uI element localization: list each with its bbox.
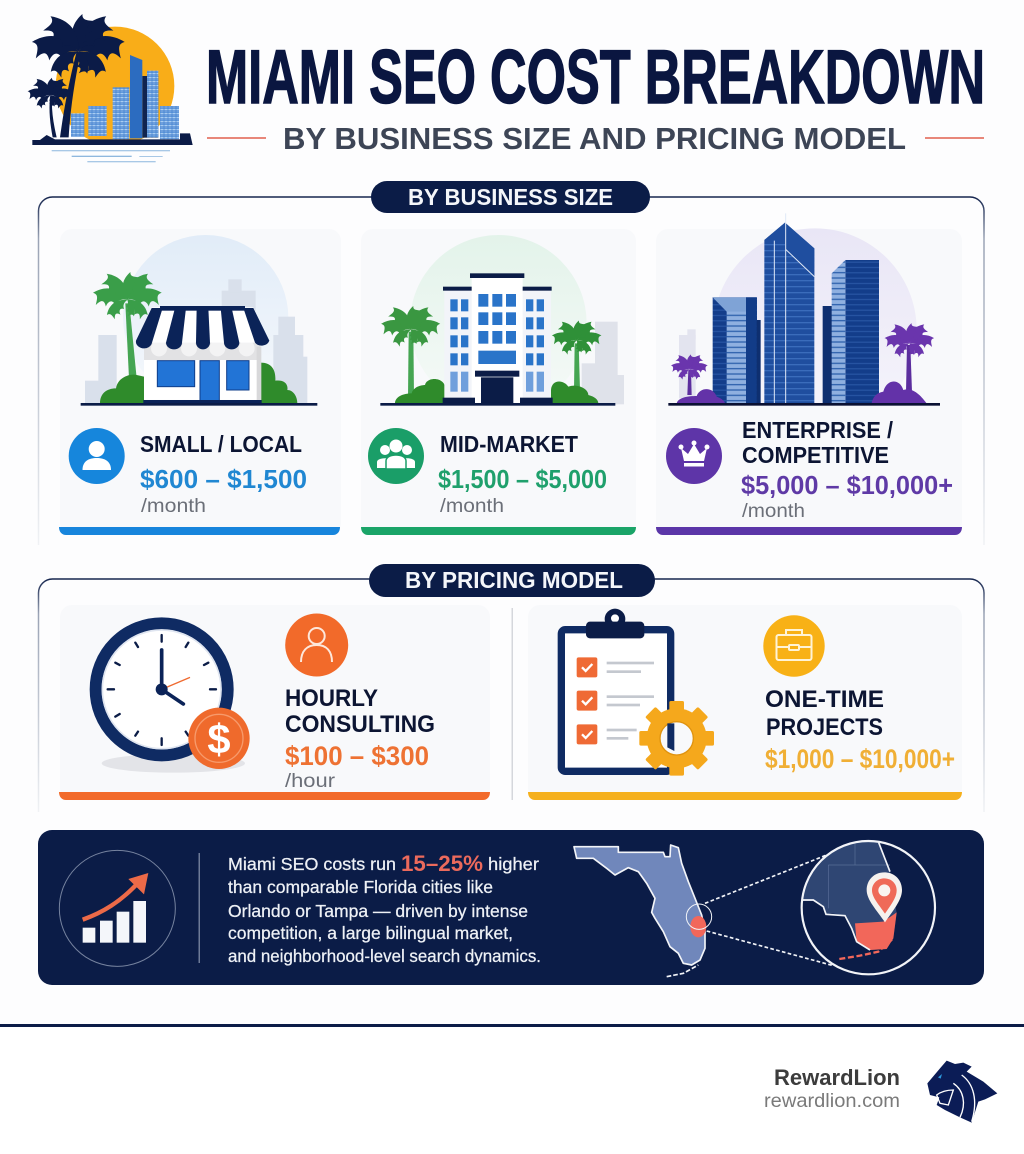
label and price: ENTERPRISE / — [742, 417, 894, 443]
icon: lion head — [927, 1061, 997, 1123]
label and price: HOURLY — [285, 685, 378, 712]
card: small / local — [59, 229, 341, 535]
illustration: clock with dollar coin: $ — [207, 715, 231, 762]
label and price — [741, 417, 953, 522]
footer brand — [764, 1061, 997, 1123]
card: one-time projects — [528, 605, 962, 800]
label and price: COMPETITIVE — [742, 442, 889, 468]
label and price: MID-MARKET — [440, 431, 578, 457]
panel: by pricing model — [38, 564, 984, 812]
illustration: office building — [380, 235, 624, 412]
section frame — [38, 197, 984, 545]
card: hourly consulting — [59, 605, 490, 800]
label and price: /month — [440, 496, 504, 517]
section heading pill: BY BUSINESS SIZE — [408, 184, 613, 210]
icon: rising bar chart — [59, 850, 175, 966]
label and price: SMALL / LOCAL — [140, 431, 302, 457]
illustration: clock with dollar coin — [96, 623, 250, 773]
illustration: storefront — [81, 235, 317, 406]
label and price: /month — [141, 496, 206, 517]
text: Miami costs note: Orlando or Tampa — driven by intense — [228, 901, 528, 921]
section heading pill: BY PRICING MODEL — [405, 567, 623, 593]
icon: person outline — [285, 614, 348, 676]
illustration: skyscrapers — [668, 214, 940, 406]
label and price: $1,000 – $10,000+ — [765, 744, 955, 774]
card: mid-market — [361, 229, 636, 535]
section frame — [38, 579, 984, 812]
text: Miami costs note: 15–25% — [401, 851, 483, 876]
label and price: ONE-TIME — [765, 686, 884, 713]
text: Miami costs note — [228, 851, 541, 966]
footer brand: RewardLion — [774, 1065, 900, 1090]
icon: group of people — [368, 428, 424, 484]
section heading pill — [371, 181, 650, 213]
map: Florida with Miami zoom — [574, 838, 935, 977]
label and price — [765, 686, 955, 774]
text: Miami costs note: and neighborhood-level search dynamics. — [228, 946, 541, 966]
accent bar — [656, 527, 962, 535]
callout: Miami premium banner — [38, 830, 984, 985]
panel: by business size — [38, 181, 984, 545]
label and price — [140, 431, 307, 517]
label and price: PROJECTS — [766, 714, 883, 741]
footer brand: rewardlion.com — [764, 1090, 900, 1112]
footer divider — [0, 1024, 1024, 1027]
text: Miami costs note: Miami SEO costs run — [228, 854, 396, 874]
accent bar — [59, 792, 490, 800]
icon: briefcase — [763, 615, 825, 677]
text: Miami costs note: than comparable Florida cities like — [228, 877, 493, 897]
label and price: /hour — [285, 771, 336, 792]
text: Miami costs note: higher — [488, 854, 539, 874]
label and price: $5,000 – $10,000+ — [741, 470, 953, 500]
card: enterprise / competitive — [656, 213, 962, 535]
label and price — [438, 431, 607, 517]
subtitle with side rules: BY BUSINESS SIZE AND PRICING MODEL — [283, 121, 906, 156]
text: Miami costs note: competition, a large bilingual market, — [228, 923, 513, 943]
accent bar — [528, 792, 962, 800]
accent bar — [361, 527, 636, 535]
section heading pill — [369, 564, 655, 597]
label and price — [285, 685, 435, 792]
label and price: CONSULTING — [285, 711, 435, 738]
accent bar — [59, 527, 340, 535]
label and price: $1,500 – $5,000 — [438, 464, 607, 494]
label and price: $600 – $1,500 — [140, 464, 307, 494]
icon: person — [69, 428, 125, 484]
icon: crown — [666, 428, 722, 484]
label and price: /month — [742, 501, 805, 522]
illustration: clipboard checklist with gear — [561, 609, 714, 776]
logo: palm trees, sun and Miami skyline — [28, 12, 193, 162]
label and price: $100 – $300 — [285, 741, 429, 771]
